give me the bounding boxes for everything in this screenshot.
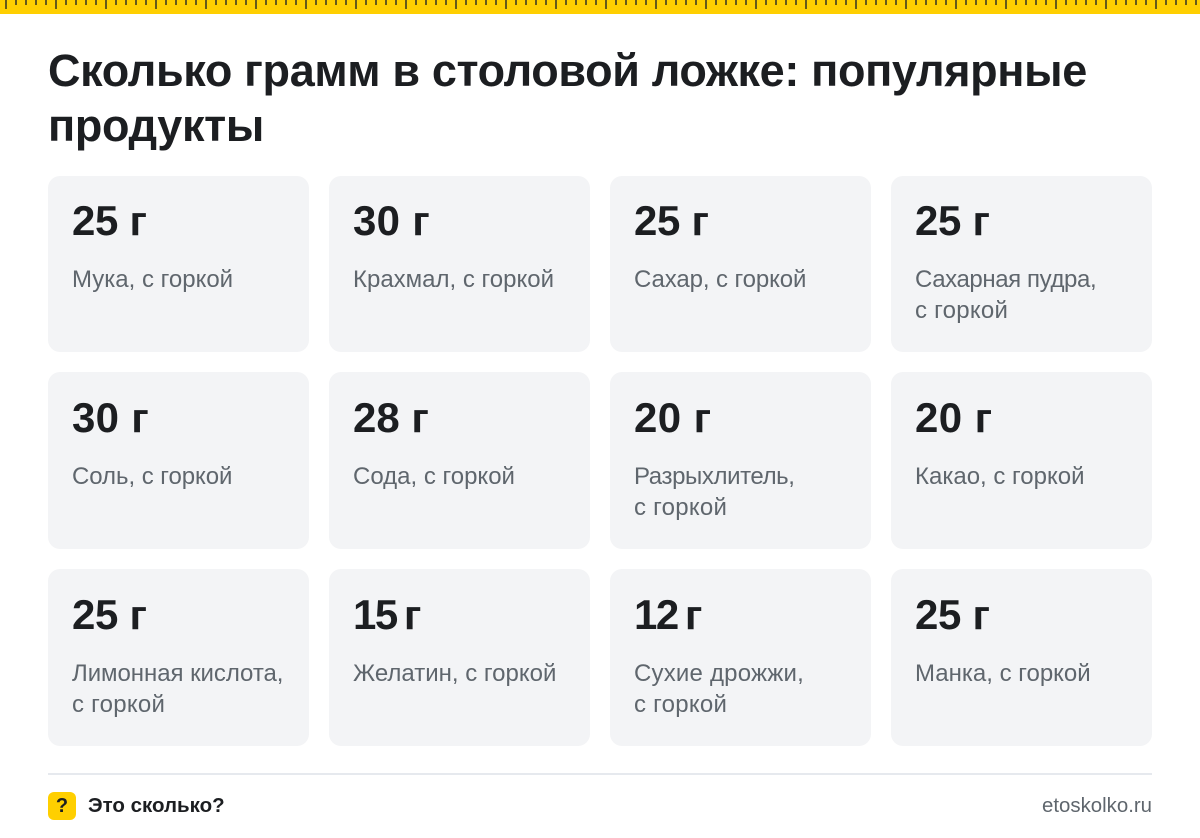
card: сахарная пудра [891, 176, 1152, 352]
card: сахар: 25 г [634, 197, 709, 244]
card: какао: Какао, с горкой [915, 463, 1084, 490]
card: сахарная пудра: 25 г [915, 197, 990, 244]
card: сухие дрожжи: Сухие дрожжи, [634, 660, 804, 687]
card: сахарная пудра: Сахарная пудра, [915, 266, 1096, 293]
card: желатин: Желатин, с горкой [353, 660, 556, 687]
title [48, 45, 1087, 151]
card: сахар: Сахар, с горкой [634, 266, 806, 293]
title: Сколько грамм в столовой ложке: популярные [48, 45, 1087, 96]
ruler strip [0, 0, 1200, 14]
card: мука [48, 176, 309, 352]
card: манка: 25 г [915, 591, 990, 638]
card: лимонная кислота: Лимонная кислота, [72, 660, 283, 687]
card: какао [891, 372, 1152, 549]
card: сухие дрожжи [610, 569, 871, 746]
card: манка [891, 569, 1152, 746]
card: крахмал: 30 г [353, 197, 430, 244]
card: разрыхлитель [610, 372, 871, 549]
card: соль: 30 г [72, 394, 149, 441]
card: мука: 25 г [72, 197, 147, 244]
card: разрыхлитель: с горкой [634, 494, 727, 521]
card: лимонная кислота: с горкой [72, 691, 165, 718]
card: желатин [329, 569, 590, 746]
card: лимонная кислота [48, 569, 309, 746]
card: манка: Манка, с горкой [915, 660, 1091, 687]
card: сахар [610, 176, 871, 352]
title: продукты [48, 100, 264, 151]
card: мука: Мука, с горкой [72, 266, 233, 293]
card: сухие дрожжи: с горкой [634, 691, 727, 718]
card: разрыхлитель: Разрыхлитель, [634, 463, 795, 490]
card: соль: Соль, с горкой [72, 463, 232, 490]
footer label: Это сколько? [88, 794, 225, 817]
card: сухие дрожжи: 12 г [634, 591, 701, 638]
icon: question mark: ? [56, 795, 68, 817]
card: сода: Сода, с горкой [353, 463, 515, 490]
footer site: etoskolko.ru [1042, 795, 1152, 817]
card: сахарная пудра: с горкой [915, 297, 1008, 324]
card: крахмал [329, 176, 590, 352]
card: сода [329, 372, 590, 549]
card: желатин: 15 г [353, 591, 420, 638]
card: крахмал: Крахмал, с горкой [353, 266, 554, 293]
card: какао: 20 г [915, 394, 992, 441]
card: разрыхлитель: 20 г [634, 394, 711, 441]
card: сода: 28 г [353, 394, 429, 441]
card: соль [48, 372, 309, 549]
icon: question mark [48, 792, 76, 820]
card: лимонная кислота: 25 г [72, 591, 147, 638]
